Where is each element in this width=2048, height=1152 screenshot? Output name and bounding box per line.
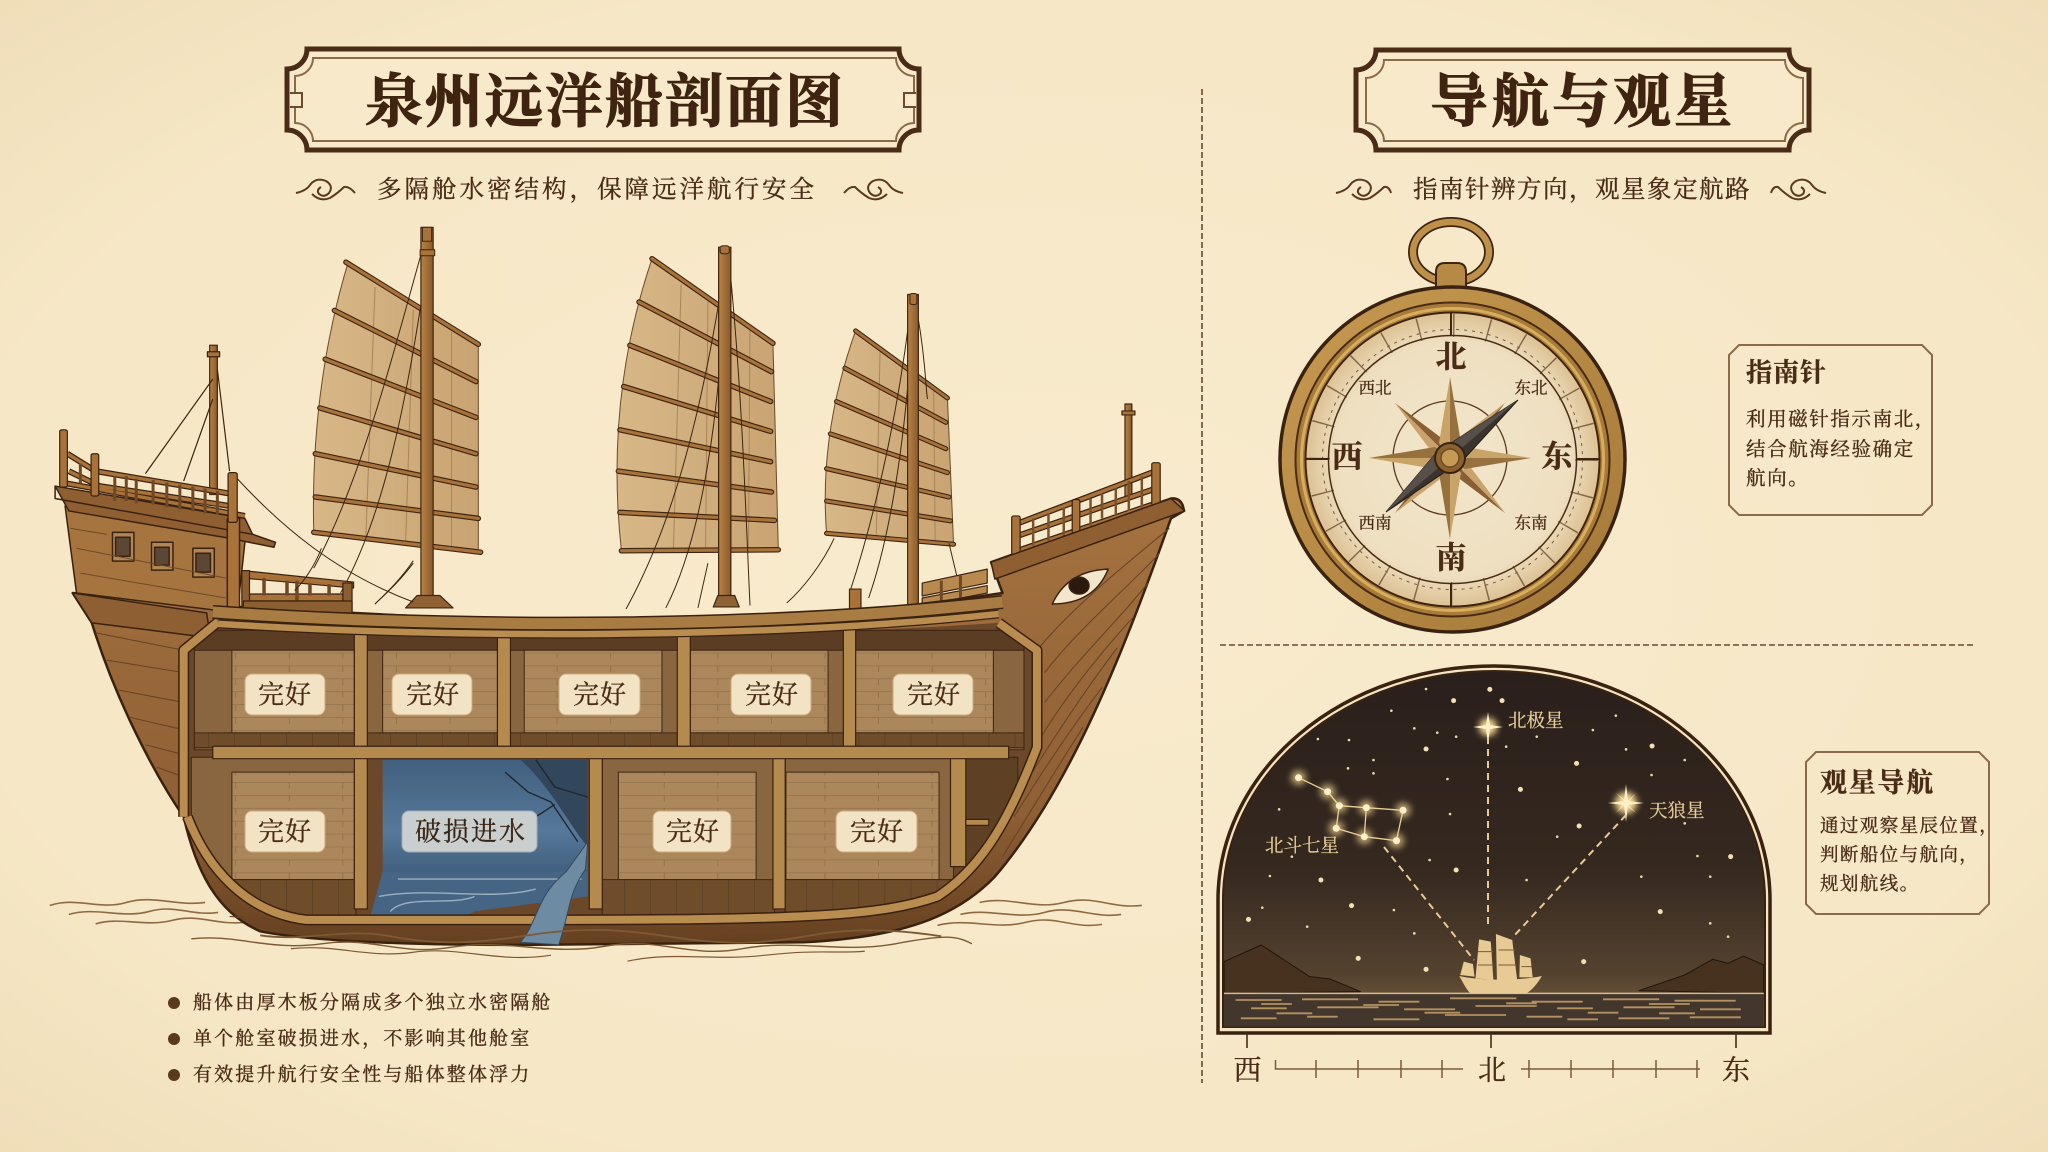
stern railing <box>60 430 245 522</box>
mountains, sea and small ship <box>1224 934 1764 1027</box>
interior compartments <box>189 622 1032 914</box>
left mountain <box>1224 945 1361 993</box>
callout: compass: 利用磁针指示南北， <box>1746 408 1936 430</box>
bullet list: 船体由厚木板分隔成多个独立水密隔舱 <box>193 992 553 1014</box>
leak waterfall <box>520 842 588 945</box>
bullet list <box>168 992 553 1086</box>
main deck beams <box>213 602 1003 634</box>
star labels <box>1265 710 1705 857</box>
small stars <box>1248 689 1731 969</box>
lower compartment walls <box>191 757 1018 924</box>
polaris star <box>1473 712 1503 745</box>
compass direction labels: 南 <box>1436 540 1466 576</box>
callout: compass: 指南针 <box>1746 358 1827 388</box>
horizon scale: 西 <box>1233 1056 1262 1086</box>
upper label 3: 完好 <box>573 680 627 710</box>
lower label 3 <box>653 811 731 852</box>
bullet list: 有效提升航行安全性与船体整体浮力 <box>193 1064 531 1086</box>
compass rose <box>1369 377 1531 539</box>
sail 1 <box>313 227 481 608</box>
callout: star navigation: 通过观察星辰位置， <box>1820 816 1999 837</box>
star labels: 北极星 <box>1508 710 1564 732</box>
sea waves in front <box>191 930 972 961</box>
horizontal divider <box>1220 644 1975 646</box>
night sky dome <box>1218 666 1770 1033</box>
breached label: 破损进水 <box>415 818 527 846</box>
subtitle: ship: 多隔舱水密结构，保障远洋航行安全 <box>377 176 817 204</box>
compass direction labels: 东北 <box>1514 378 1548 398</box>
stern castle <box>55 486 276 638</box>
horizon scale: 东 <box>1722 1054 1750 1086</box>
title: navigation and stars <box>1356 50 1809 150</box>
upper label 4: 完好 <box>745 680 799 710</box>
horizon scale <box>1233 1033 1750 1086</box>
compass direction labels: 西北 <box>1358 378 1392 398</box>
lower label 4: 完好 <box>850 818 904 846</box>
lower label 3: 完好 <box>666 818 720 846</box>
lower label 4 <box>836 811 917 852</box>
mid-deck railing <box>242 571 354 615</box>
callout: star navigation: 判断船位与航向， <box>1820 845 1979 866</box>
subtitle: navigation <box>1336 176 1826 204</box>
bow railing <box>1012 463 1160 555</box>
star labels: 天狼星 <box>1649 801 1705 822</box>
lower label 1 <box>245 811 325 852</box>
callout: star navigation: 规划航线。 <box>1820 874 1920 895</box>
callout: star navigation <box>1806 752 1999 914</box>
compass direction labels: 北 <box>1436 340 1466 374</box>
title: ship cross-section: 泉州远洋船剖面图 <box>365 70 845 134</box>
sight lines <box>1384 737 1626 960</box>
upper label 2: 完好 <box>406 680 460 710</box>
upper compartment walls <box>194 630 1024 750</box>
compass direction labels: 东 <box>1542 440 1574 474</box>
upper label 5: 完好 <box>907 680 961 710</box>
vertical divider <box>1201 89 1203 1083</box>
waves behind the hull <box>50 900 1142 925</box>
compass <box>1280 222 1625 632</box>
hull planks <box>96 528 1169 936</box>
compass direction labels: 西 <box>1332 440 1362 474</box>
compass direction labels: 西南 <box>1358 514 1392 532</box>
sirius star <box>1608 784 1644 822</box>
sea <box>1224 993 1764 1027</box>
star labels: 北斗七星 <box>1265 836 1339 857</box>
upper label 1: 完好 <box>258 680 312 710</box>
mid rail <box>849 569 987 614</box>
upper label 5 <box>893 674 973 715</box>
compass direction labels <box>1332 340 1574 576</box>
sail 2 <box>617 246 778 609</box>
ship cross-section illustration <box>50 227 1185 961</box>
subtitle: navigation: 指南针辨方向，观星象定航路 <box>1413 176 1751 204</box>
upper label 4 <box>731 674 811 715</box>
small ship <box>1459 934 1542 993</box>
callout: compass: 结合航海经验确定 <box>1746 438 1915 460</box>
bullet list: 单个舱室破损进水，不影响其他舱室 <box>193 1028 531 1050</box>
rigging to stern <box>237 479 413 604</box>
big dipper <box>1298 778 1403 841</box>
horizon scale: 北 <box>1478 1056 1506 1086</box>
lower label 1: 完好 <box>258 818 312 846</box>
title: ship cross-section <box>287 49 919 150</box>
callout: compass: 航向。 <box>1746 468 1809 490</box>
flooded compartment <box>367 758 589 922</box>
title: navigation and stars: 导航与观星 <box>1430 70 1735 134</box>
upper label 3 <box>559 674 640 715</box>
breached label <box>402 811 537 852</box>
compass case <box>1280 287 1625 632</box>
front flag pole <box>1122 404 1135 498</box>
upper label 2 <box>392 674 472 715</box>
callout: star navigation: 观星导航 <box>1820 768 1935 798</box>
rear mast <box>145 345 230 495</box>
compass ring and neck <box>1413 222 1489 288</box>
sail 3 <box>787 294 960 608</box>
cutaway frame <box>184 622 1037 920</box>
compass direction labels: 东南 <box>1514 514 1548 532</box>
compartment labels: intact and breached <box>245 674 973 852</box>
bow eye <box>1052 569 1108 604</box>
hull <box>73 498 1184 945</box>
right mountain <box>1639 956 1764 993</box>
subtitle: ship <box>296 176 903 204</box>
frame dividers <box>213 605 1009 909</box>
horizon <box>1224 992 1764 994</box>
bow cap <box>991 498 1185 579</box>
upper label 1 <box>245 674 325 715</box>
callout: compass <box>1729 345 1936 515</box>
compass needle <box>1386 400 1518 512</box>
sea ripples <box>1236 998 1741 1019</box>
